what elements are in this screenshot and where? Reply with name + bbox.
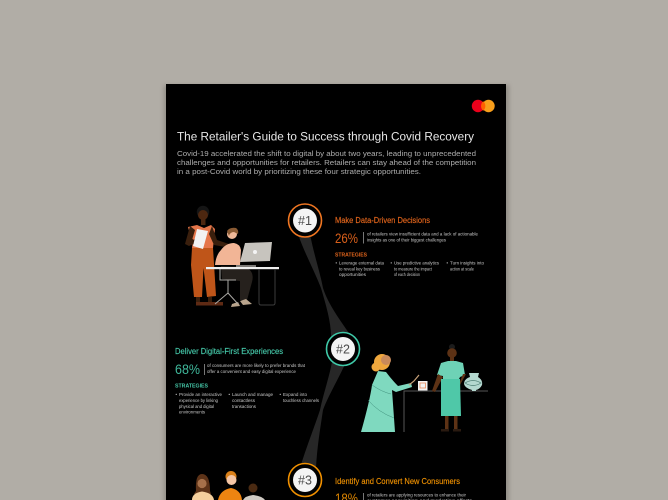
strategies list: to measure the impact <box>394 266 433 271</box>
badge #2: #2 <box>336 342 350 356</box>
vase <box>464 373 482 391</box>
poster panel <box>166 84 506 500</box>
title: The Retailer's Guide to Success through Covid Recovery <box>177 130 475 144</box>
badge #3: #3 <box>298 474 312 488</box>
badge #1: #1 <box>298 214 312 228</box>
heading: Identify and Convert New Consumers <box>335 477 460 486</box>
strategies list <box>336 260 485 277</box>
section 2 text <box>175 347 319 414</box>
connector ribbon <box>298 234 351 336</box>
standing woman <box>185 206 232 306</box>
strategies list: Leverage external data <box>339 260 385 266</box>
intro text: Covid-19 accelerated the shift to digital by about two years, leading to unprecedented <box>177 149 476 158</box>
strategies list: transactions <box>232 404 256 409</box>
poster shadow <box>164 85 509 500</box>
heading: Deliver Digital-First Experiences <box>175 347 283 356</box>
strategies list: • <box>280 392 282 397</box>
strategies list: Turn insights into <box>450 260 485 266</box>
intro text <box>177 149 476 176</box>
desk <box>206 267 279 305</box>
strategies list: of each decision <box>394 272 421 277</box>
strategies list: to reveal key business <box>339 266 380 271</box>
strategies list: Provide an interactive <box>179 392 223 397</box>
strategies list: • <box>228 392 230 397</box>
stat description <box>367 232 479 242</box>
badge #2 <box>326 332 360 366</box>
stat description <box>367 492 472 500</box>
strategies list: Expand into <box>283 392 308 397</box>
strategies heading: STRATEGIES <box>175 384 209 390</box>
clerk <box>432 344 466 432</box>
strategies list: opportunities <box>339 272 366 277</box>
stat description: of retailers view insufficient data and a lack of actionable <box>367 232 479 236</box>
illustration: two colleagues at desk <box>185 206 279 307</box>
illustration: group of consumers <box>192 471 265 500</box>
badge #1 <box>288 204 322 237</box>
strategies list: Launch and manage <box>232 392 274 397</box>
person middle <box>218 471 242 500</box>
section 1 text <box>335 216 485 277</box>
badge #3 <box>288 464 322 496</box>
stat description: of consumers are more likely to prefer brands that <box>207 363 306 368</box>
strategies list: • <box>336 260 338 266</box>
icon: mastercard logo <box>472 100 495 112</box>
strategies list: • <box>176 392 178 397</box>
seated woman <box>215 228 253 307</box>
strategies list: contactless <box>232 398 255 403</box>
section 3 text <box>335 477 472 500</box>
laptop <box>236 242 272 266</box>
strategies list <box>176 392 319 414</box>
counter <box>404 391 488 432</box>
connector ribbon lower <box>300 362 346 468</box>
shopper <box>361 354 419 432</box>
stat description: offer a convenient and easy digital experience <box>207 369 297 374</box>
stat: 68% <box>175 361 200 377</box>
person left <box>192 474 214 500</box>
paper <box>193 229 208 249</box>
strategies list: physical and digital <box>179 404 214 409</box>
strategies list: • <box>390 260 392 266</box>
stat: 26% <box>335 230 358 246</box>
illustration: shopper and clerk at counter <box>361 344 488 432</box>
strategies heading: STRATEGIES <box>335 252 368 258</box>
strategies list: experience by linking <box>179 398 219 403</box>
strategies list: touchless channels <box>283 398 319 403</box>
strategies list: Use predictive analytics <box>394 260 439 266</box>
heading: Make Data-Driven Decisions <box>335 216 430 225</box>
intro text: in a post-Covid world by prioritizing these four strategic opportunities. <box>177 167 421 176</box>
stat description: insights as one of their biggest challenges <box>367 238 446 242</box>
person right <box>243 484 265 500</box>
strategies list: environments <box>179 410 205 414</box>
intro text: challenges and opportunities for retailers. Retailers can stay ahead of the competition <box>177 158 476 167</box>
stat description: of retailers are applying resources to enhance their <box>367 492 467 498</box>
chair <box>215 269 238 304</box>
display card <box>418 381 428 392</box>
strategies list: • <box>446 260 448 266</box>
strategies list: action at scale <box>450 266 475 271</box>
stat description <box>207 363 306 374</box>
